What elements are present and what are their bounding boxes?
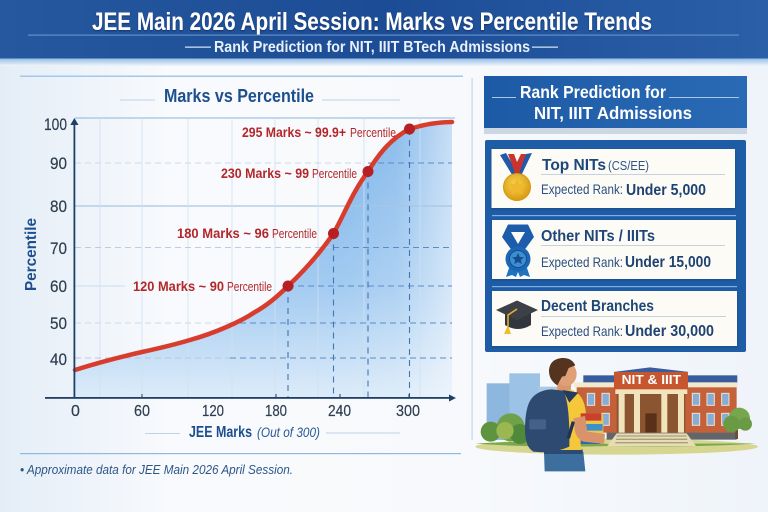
data labels: Percentile <box>227 280 272 294</box>
footnote: • Approximate data for JEE Main 2026 April Session. <box>20 462 293 477</box>
x-axis title <box>145 424 400 441</box>
y-axis ticks: 90 <box>50 154 67 173</box>
card: other NITs <box>492 220 736 279</box>
x-axis ticks <box>71 403 420 420</box>
y-axis title: Percentile <box>23 218 40 291</box>
panel: marks vs percentile chart <box>20 76 473 441</box>
card: decent branches: Decent Branches <box>541 298 654 315</box>
x-axis ticks: 240 <box>328 403 351 420</box>
data labels: Percentile <box>272 227 317 241</box>
y-axis ticks: 70 <box>50 239 67 258</box>
y-axis ticks: 60 <box>50 277 67 296</box>
y-axis ticks <box>44 115 67 369</box>
data labels: Percentile <box>350 126 396 140</box>
panel: rank prediction heading <box>484 76 747 134</box>
chart heading: Marks vs Percentile <box>164 86 314 106</box>
data points <box>282 124 415 292</box>
y-axis ticks: 100 <box>44 115 67 134</box>
ground <box>475 439 758 455</box>
card: decent branches: Under 30,000 <box>625 323 714 340</box>
card: other NITs: Under 15,000 <box>625 254 711 271</box>
building sign: NIT & IIIT <box>622 373 681 387</box>
card: top NITs: Expected Rank: <box>541 181 623 197</box>
header banner <box>0 0 768 58</box>
trees <box>481 408 752 444</box>
data labels: 295 Marks ~ 99.9+ <box>242 124 346 140</box>
card: top NITs: Under 5,000 <box>626 182 706 199</box>
icon: gold medal <box>500 153 532 200</box>
city skyline <box>487 373 558 440</box>
axes <box>45 118 456 402</box>
x-axis ticks: 60 <box>134 403 150 420</box>
card: top NITs <box>492 149 735 208</box>
x-axis title: (Out of 300) <box>257 425 320 440</box>
x-axis ticks: 120 <box>202 403 224 420</box>
y-axis ticks: 40 <box>50 350 67 369</box>
card: top NITs: Top NITs <box>542 157 606 174</box>
panel: rank prediction heading: NIT, IIIT Admissions <box>534 103 692 123</box>
data labels: 120 Marks ~ 90 <box>133 278 224 294</box>
data labels: 180 Marks ~ 96 <box>177 225 269 241</box>
icon: graduation cap <box>496 300 538 334</box>
data labels: Percentile <box>312 167 357 181</box>
data labels <box>133 124 396 294</box>
building <box>574 367 738 446</box>
area under the curve <box>75 122 452 397</box>
data labels: 230 Marks ~ 99 <box>221 165 309 181</box>
subtitle: Rank Prediction for NIT, IIIT BTech Admissions <box>214 39 530 56</box>
title: JEE Main 2026 April Session: Marks vs Percentile Trends <box>92 8 652 36</box>
student <box>525 358 605 471</box>
card: top NITs: (CS/EE) <box>608 158 649 173</box>
illustration: student and campus <box>475 358 758 471</box>
card: decent branches: Expected Rank: <box>541 323 623 339</box>
percentile curve <box>75 122 452 370</box>
x-axis ticks: 300 <box>396 403 420 420</box>
card: decent branches <box>492 291 737 346</box>
x-axis title: JEE Marks <box>189 424 252 441</box>
x-axis ticks: 0 <box>71 403 80 420</box>
panel: rank cards <box>485 140 746 352</box>
y-axis ticks: 80 <box>50 197 67 216</box>
y-axis ticks: 50 <box>50 314 67 333</box>
grid lines <box>75 118 455 397</box>
icon: blue rosette <box>502 224 534 277</box>
panel: rank prediction heading: Rank Prediction for <box>520 82 666 102</box>
x-axis ticks: 180 <box>265 403 287 420</box>
card: other NITs: Other NITs / IIITs <box>541 228 655 245</box>
card: other NITs: Expected Rank: <box>541 254 623 270</box>
